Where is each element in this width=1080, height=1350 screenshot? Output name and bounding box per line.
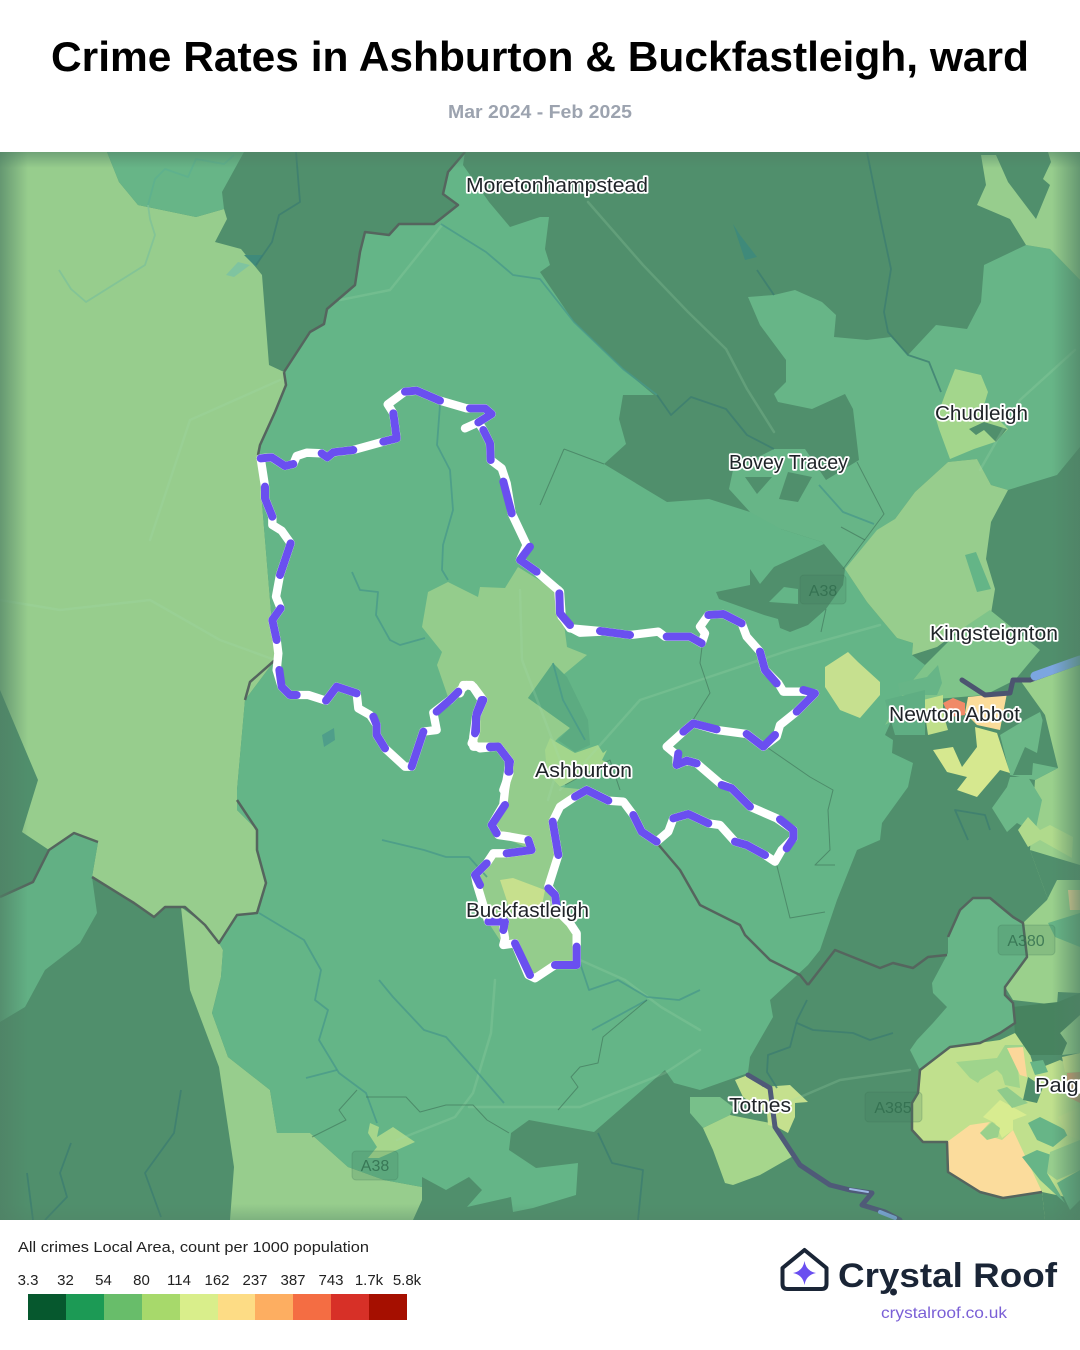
road shield: A38 north: A38 — [809, 583, 837, 600]
legend scale labels: 3.3 — [18, 1272, 38, 1289]
website url: crystalroof.co.uk — [881, 1305, 1008, 1322]
legend scale labels: 237 — [242, 1272, 268, 1289]
panel: Ashburton & Buckfastleigh light ward — [422, 567, 587, 978]
panel: north-east corner — [977, 152, 1080, 280]
road shield: A385 — [865, 1092, 922, 1122]
logo: Crystal Roof — [782, 1250, 1058, 1322]
legend title: All crimes Local Area, count per 1000 population — [18, 1239, 369, 1256]
icon: house with star — [782, 1250, 826, 1289]
rivers — [27, 152, 990, 1220]
panel: Newton Abbot wards — [825, 652, 880, 718]
place labels: Totnes — [729, 1095, 791, 1117]
panel: central green area — [212, 152, 925, 1212]
panel: Paignton wards — [912, 1033, 1080, 1220]
road shield: A38 south: A38 — [361, 1158, 389, 1175]
thin ward lines — [312, 449, 884, 1137]
legend scale labels: 80 — [133, 1272, 150, 1289]
legend scale labels: 387 — [280, 1272, 306, 1289]
panel: north-west green patch — [107, 152, 244, 217]
panel: Totnes wards — [690, 1097, 733, 1128]
lakes — [226, 224, 757, 747]
panel: A38 south village — [368, 1123, 415, 1158]
place labels: Buckfastleigh — [466, 900, 589, 922]
legend scale labels: 54 — [95, 1272, 112, 1289]
panel: Chudleigh light area — [936, 369, 1008, 459]
road shield: A380: A380 — [1007, 933, 1045, 950]
logo wordmark: Crystal Roof — [838, 1257, 1058, 1295]
legend scale labels: 743 — [318, 1272, 344, 1289]
place labels: Kingsteignton — [930, 623, 1058, 645]
legend scale labels: 162 — [204, 1272, 230, 1289]
legend scale labels — [18, 1272, 422, 1289]
panel: Kingsteignton area — [885, 610, 1040, 725]
choropleth map — [0, 152, 1080, 1220]
panel: far east light area — [1020, 665, 1080, 905]
roads — [339, 200, 1067, 1137]
panel: south-west light strip — [181, 907, 422, 1220]
place labels — [466, 175, 1080, 1117]
legend — [18, 1239, 422, 1320]
subtitle: date range: Mar 2024 - Feb 2025 — [448, 102, 632, 122]
road shield: A38 north — [800, 575, 846, 604]
river estuaries — [748, 660, 1080, 1220]
place labels: Chudleigh — [935, 403, 1028, 425]
road shield: A385: A385 — [874, 1100, 912, 1117]
district boundary lines — [0, 152, 1042, 1198]
place labels: Bovey Tracey — [729, 452, 848, 474]
ward boundary: Ashburton & Buckfastleigh — [261, 391, 815, 978]
title: Crime Rates in Ashburton & Buckfastleigh, ward — [51, 33, 1029, 80]
legend scale labels: 5.8k — [393, 1272, 422, 1289]
place labels: Newton Abbot — [889, 704, 1020, 726]
legend scale labels: 114 — [167, 1272, 191, 1289]
road shield: A380 — [998, 925, 1055, 955]
panel: east light area — [845, 459, 1008, 655]
panel: west light area — [0, 152, 286, 943]
panel: A380 light ward — [1005, 880, 1080, 1005]
map edge vignette — [0, 152, 1080, 1220]
place labels: Moretonhampstead — [466, 175, 648, 197]
panel: west green patch — [0, 833, 98, 1022]
legend scale labels: 1.7k — [355, 1272, 384, 1289]
panel: south-east mid-green ward — [910, 898, 1027, 1070]
legend colour bar — [28, 1294, 407, 1320]
legend scale labels: 32 — [57, 1272, 74, 1289]
road shield: A38 south — [352, 1151, 398, 1180]
place labels: Ashburton — [535, 760, 632, 782]
panel: Bovey Tracey dark blobs — [745, 477, 772, 494]
panel: A38 dark patch — [716, 544, 845, 632]
panel: mid-green north-east — [729, 245, 1080, 569]
